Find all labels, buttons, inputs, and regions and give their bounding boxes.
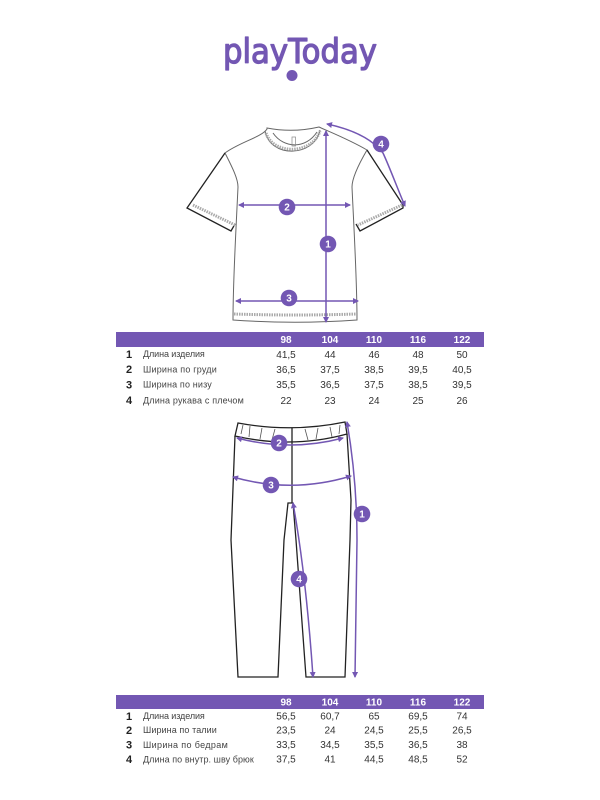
row 4: 52 (456, 754, 468, 766)
arrow: chest width (239, 204, 350, 206)
logo: playToday: playToday (223, 32, 377, 72)
table: trousers sizes (116, 695, 484, 766)
arrow: length (325, 131, 327, 322)
row 2: 39,5 (408, 365, 428, 376)
row 2: Ширина по груди (143, 364, 217, 374)
table header (116, 695, 484, 709)
row 2: 24 (324, 726, 336, 736)
row 2: 2 (126, 364, 132, 376)
badge 1 (320, 236, 336, 252)
row 2 (126, 364, 472, 376)
badge 2: 2 (284, 202, 290, 214)
badge 3: 3 (268, 480, 274, 492)
row 1 (126, 711, 468, 723)
row 4: 26 (456, 396, 468, 407)
row 3: 3 (126, 740, 132, 752)
badge 3 (263, 477, 279, 493)
row 1: Длина изделия (143, 711, 205, 721)
row 1: 60,7 (320, 712, 340, 722)
trousers diagram (231, 422, 370, 677)
arrow: sleeve length (327, 124, 405, 206)
badge 4 (373, 136, 389, 152)
table header: 110 (366, 335, 383, 346)
row 1: 48 (412, 350, 424, 361)
row 3: 35,5 (364, 740, 384, 751)
arrow: bottom width (236, 300, 358, 302)
row 2: 37,5 (320, 365, 340, 376)
row 4 (126, 395, 468, 407)
badge 2: 2 (276, 438, 282, 450)
badge 1 (354, 506, 370, 522)
row 3: 3 (126, 380, 132, 392)
table header: 116 (410, 698, 427, 708)
row 4: 48,5 (408, 754, 428, 766)
row 4: 25 (412, 396, 424, 407)
table header: 122 (454, 335, 471, 346)
row 1: 50 (456, 350, 468, 361)
row 4: 4 (126, 754, 133, 766)
table header: 98 (280, 698, 292, 708)
row 3: 36,5 (408, 740, 428, 751)
row 3 (126, 740, 468, 752)
table: t-shirt sizes (116, 332, 484, 407)
badge 3 (281, 290, 297, 306)
row 4: 44,5 (364, 754, 384, 766)
badge 1: 1 (325, 240, 331, 250)
row 4: Длина рукава с плечом (143, 396, 244, 406)
row 4: 24 (368, 396, 380, 407)
row 3: 35,5 (276, 380, 296, 391)
table header: 110 (366, 698, 383, 708)
row 1: 69,5 (408, 712, 428, 722)
row 1: 1 (126, 711, 132, 723)
row 4: 41 (324, 754, 336, 766)
badge 4 (291, 571, 307, 587)
badge 1: 1 (359, 510, 365, 520)
row 4: 22 (280, 396, 292, 407)
row 1: 44 (324, 350, 336, 361)
arrow: waist width (237, 438, 343, 445)
trousers outline (231, 422, 351, 677)
row 4 (126, 754, 468, 766)
row 1: 74 (456, 712, 468, 722)
row 1: 1 (126, 349, 132, 361)
arrow: length (347, 422, 357, 677)
row 1 (126, 349, 468, 361)
row 2: 36,5 (276, 365, 296, 376)
row 1: 65 (368, 712, 380, 722)
row 3: 38 (456, 740, 468, 751)
row 2: 2 (126, 725, 132, 737)
table header: 104 (322, 335, 339, 346)
row 4: 4 (126, 395, 133, 407)
row 2 (126, 725, 472, 737)
table header: 98 (280, 335, 292, 346)
badge 3: 3 (286, 294, 292, 304)
row 3: 39,5 (452, 380, 472, 391)
arrow: hip width (233, 476, 351, 485)
row 3: Ширина по низу (143, 380, 212, 390)
table header: 122 (454, 698, 471, 708)
row 1: 41,5 (276, 350, 296, 361)
row 2: 38,5 (364, 365, 384, 376)
row 2: 23,5 (276, 726, 296, 736)
badge 4: 4 (296, 574, 302, 586)
row 3: Ширина по бедрам (143, 740, 228, 750)
row 3: 34,5 (320, 740, 340, 751)
row 2: 26,5 (452, 726, 472, 736)
row 3: 33,5 (276, 740, 296, 751)
badge 4: 4 (378, 140, 384, 150)
row 2: 40,5 (452, 365, 472, 376)
row 1: 56,5 (276, 712, 296, 722)
row 3: 36,5 (320, 380, 340, 391)
row 3: 38,5 (408, 380, 428, 391)
t-shirt outline (187, 127, 403, 322)
table header: 116 (410, 335, 427, 346)
row 2: Ширина по талии (143, 725, 217, 735)
row 3: 37,5 (364, 380, 384, 391)
t-shirt diagram (187, 124, 405, 322)
arrow: inseam (293, 503, 313, 677)
row 1: 46 (368, 350, 380, 361)
row 4: Длина по внутр. шву брюк (143, 754, 254, 764)
row 1: Длина изделия (143, 349, 205, 359)
row 2: 24,5 (364, 726, 384, 736)
badge 2 (279, 199, 295, 215)
row 3 (126, 380, 472, 392)
row 4: 23 (324, 396, 336, 407)
row 4: 37,5 (276, 754, 296, 766)
badge 2 (271, 435, 287, 451)
row 2: 25,5 (408, 726, 428, 736)
table header: 104 (322, 698, 339, 708)
table header (116, 332, 484, 347)
